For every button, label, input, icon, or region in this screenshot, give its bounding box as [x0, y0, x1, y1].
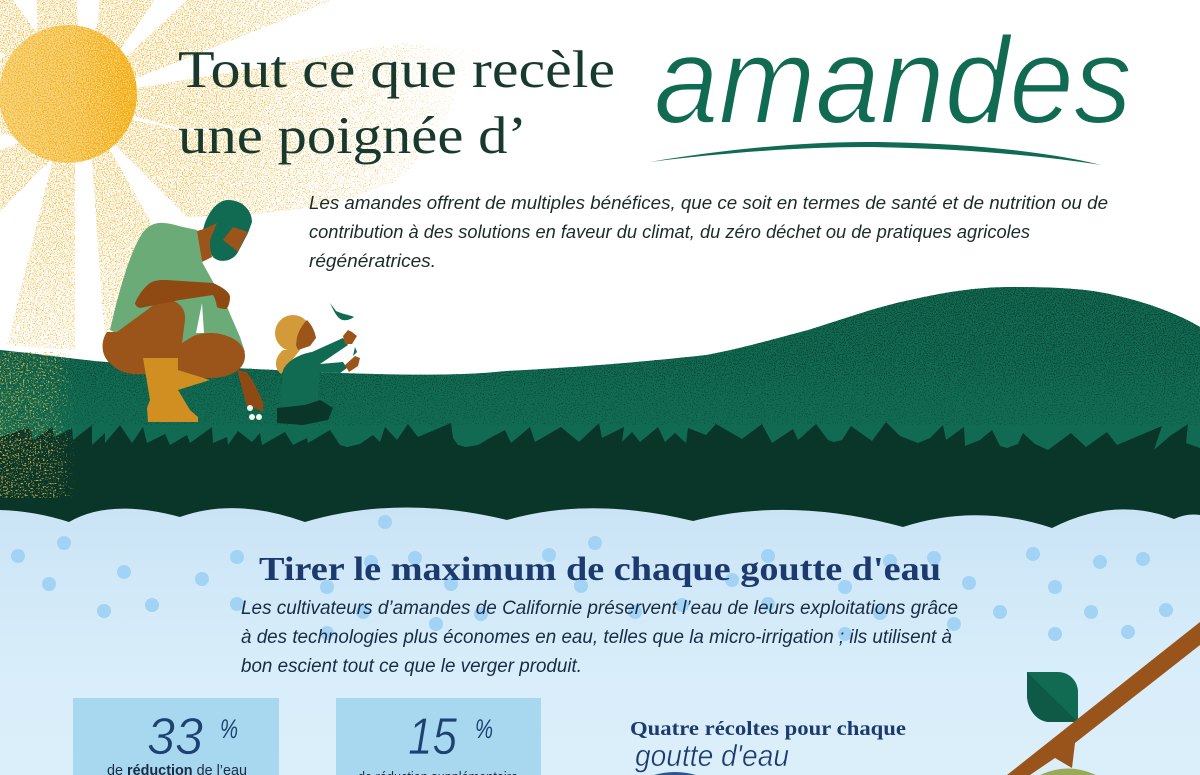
- farmer neck: [197, 223, 217, 262]
- almond hull top: [1040, 768, 1096, 775]
- farmer arm: [135, 280, 230, 309]
- water background: [0, 507, 1200, 775]
- child hair: [275, 315, 311, 351]
- stat card: 33 %: [73, 698, 279, 775]
- percent sign: %: [220, 714, 238, 744]
- stat number 33: 33: [147, 708, 203, 766]
- farmer lower arm and hand: [237, 370, 263, 412]
- leaf: [1027, 672, 1078, 722]
- almond branch illustration: [1007, 622, 1200, 775]
- script subheading: goutte d'eau: goutte d'eau: [635, 738, 789, 773]
- title: [178, 41, 615, 165]
- figure: seated child: [275, 303, 360, 425]
- gap between arm and leg: [196, 303, 204, 333]
- water droplets: [11, 515, 1173, 641]
- title script word: amandes: amandes: [654, 13, 1132, 150]
- leaf shaded half: [1027, 672, 1078, 722]
- title: une poignée d’: [178, 107, 527, 165]
- yellow grain drift on grass: [0, 352, 78, 498]
- child trousers: [277, 400, 333, 425]
- child ponytail: [276, 350, 300, 374]
- stat number 15: 15: [408, 708, 458, 766]
- percent sign: %: [475, 714, 493, 744]
- farmer legs: [103, 300, 245, 378]
- stat card: 15 %: [336, 698, 541, 775]
- intro paragraph: contribution à des solutions en faveur du climat, du zéro déchet ou de pratiques agricoles: [309, 221, 1030, 242]
- water section heading: Tirer le maximum de chaque goutte d'eau: [259, 551, 941, 588]
- intro paragraph: régénératrices.: [309, 250, 436, 271]
- almonds in hand: [247, 405, 262, 420]
- farmer hair and beard: [203, 200, 252, 261]
- dark grass band: [0, 422, 1200, 560]
- branch: [1007, 622, 1200, 775]
- child face: [296, 320, 316, 350]
- water section paragraph: bon escient tout ce que le verger produit.: [241, 656, 582, 677]
- water section paragraph: [241, 598, 958, 677]
- sun rays: [0, 0, 480, 350]
- title: Tout ce que recèle: [178, 41, 615, 99]
- child body: [280, 338, 348, 410]
- child hands: [343, 330, 360, 372]
- water section paragraph: Les cultivateurs d’amandes de Californie préservent l’eau de leurs exploitations grâce: [241, 598, 958, 619]
- leaf in hand: [353, 347, 357, 356]
- figure: crouching farmer: [103, 200, 263, 422]
- title underline swash: [650, 142, 1101, 165]
- icon: water drop top: [654, 772, 696, 775]
- hill: [0, 287, 1200, 470]
- farmer shirt: [110, 223, 245, 352]
- falling leaf: [330, 303, 354, 320]
- water section paragraph: à des technologies plus économes en eau, telles que la micro-irrigation ; ils utilisent à: [241, 627, 952, 648]
- sun: [0, 25, 137, 163]
- intro paragraph: Les amandes offrent de multiples bénéfices, que ce soit en termes de santé et de nutrition ou de: [309, 192, 1108, 213]
- farmer face: [223, 227, 248, 252]
- intro paragraph: [309, 192, 1108, 271]
- harvest subheading: Quatre récoltes pour chaque: [630, 718, 906, 740]
- farmer boot: [143, 358, 210, 422]
